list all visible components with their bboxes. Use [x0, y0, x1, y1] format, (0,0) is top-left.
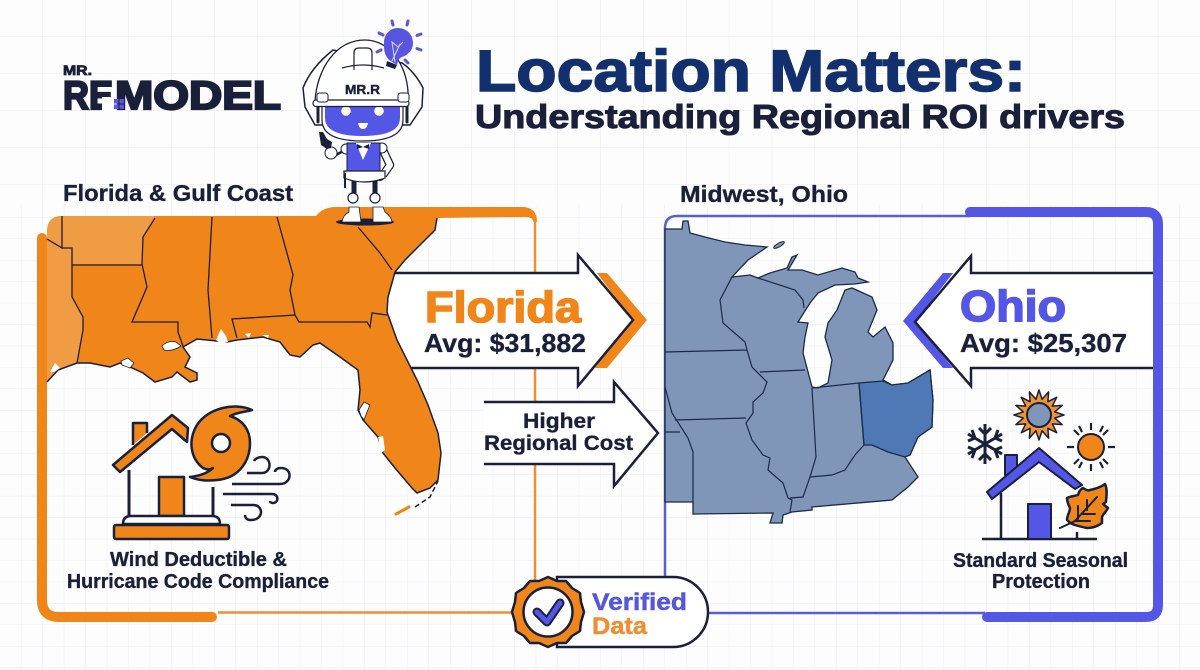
highlighted state: Ohio — [859, 370, 933, 457]
text: seasonal protection: Protection — [992, 571, 1090, 593]
logo: Mr. Remodel — [63, 62, 281, 118]
text: Ohio average cost: Ohio — [960, 282, 1066, 331]
text: wind deductible — [67, 549, 329, 593]
mascot helmet label: MR.R — [345, 82, 381, 97]
panel frame: Midwest, Ohio — [665, 212, 1158, 617]
title — [475, 39, 1125, 135]
badge: verified data: Data — [592, 613, 648, 640]
arrow: higher regional cost — [484, 382, 658, 486]
arrow: Florida average — [380, 255, 647, 386]
title: Understanding Regional ROI drivers — [475, 98, 1125, 135]
text: seasonal protection: Standard Seasonal — [953, 550, 1128, 572]
text: higher regional cost: Higher — [523, 410, 595, 433]
text: higher regional cost — [484, 410, 633, 455]
logo: Mr. Remodel: MODEL — [115, 74, 281, 118]
text: higher regional cost: Regional Cost — [484, 432, 633, 455]
text: Florida average cost: Avg: $31,882 — [424, 328, 586, 358]
text: Ohio average cost: Avg: $25,307 — [960, 328, 1127, 358]
mascot: Mr. R robot — [303, 21, 423, 226]
text: Florida average cost: Florida — [425, 283, 582, 332]
text: seasonal protection — [953, 550, 1128, 593]
heading: Midwest, Ohio: Midwest, Ohio — [680, 181, 848, 207]
text: Ohio average cost — [960, 282, 1127, 358]
text: Florida average cost — [424, 283, 586, 358]
icon: house with hurricane and wind — [113, 406, 290, 539]
icon: house with seasons — [968, 390, 1115, 539]
heading: Florida & Gulf Coast: Florida & Gulf Coast — [63, 180, 293, 206]
map: Florida and Gulf Coast states — [47, 207, 525, 514]
text: wind deductible: Hurricane Code Compliance — [67, 571, 329, 593]
arrow: Ohio average — [903, 256, 1153, 386]
icon: light bulb — [377, 21, 421, 69]
title: Location Matters: — [476, 39, 1026, 104]
text: wind deductible: Wind Deductible & — [110, 549, 287, 571]
badge: verified data — [512, 577, 708, 647]
logo: Mr. Remodel: MR. — [63, 62, 92, 78]
badge: verified data: Verified — [592, 589, 687, 616]
panel frame: Florida & Gulf Coast — [42, 207, 537, 617]
map: Midwest states — [665, 221, 933, 523]
logo: Mr. Remodel: RE — [63, 74, 113, 118]
